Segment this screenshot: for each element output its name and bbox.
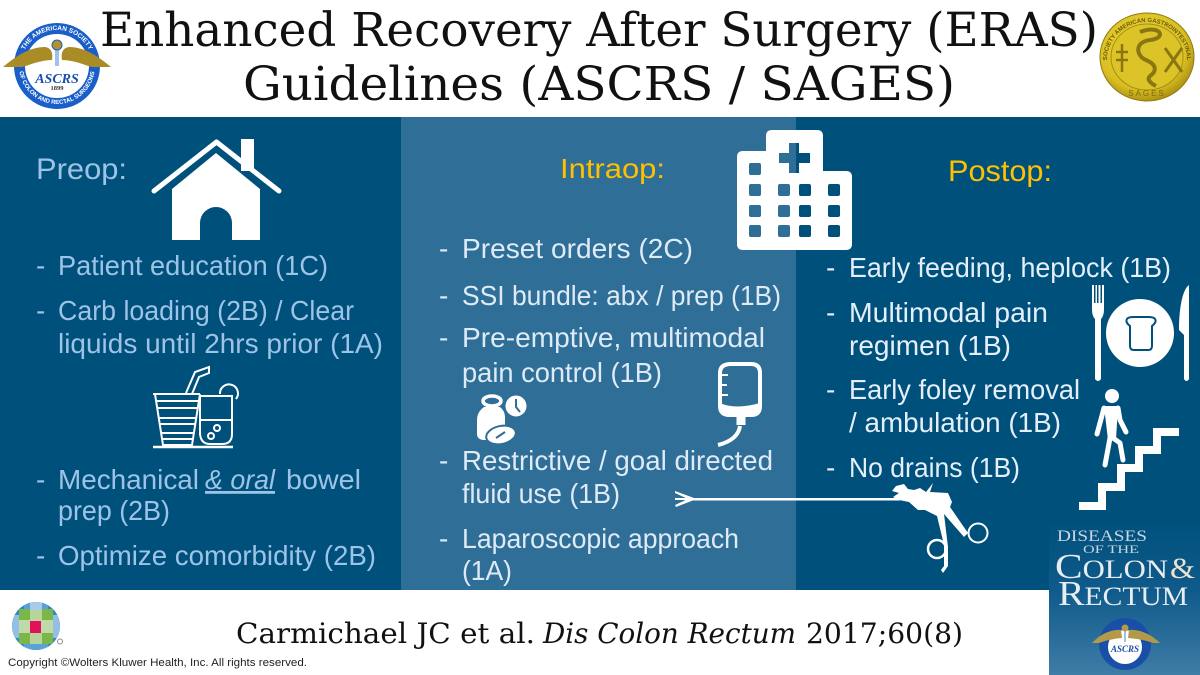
panel: postop — [796, 117, 1200, 590]
journal cover: RECTUM — [1058, 574, 1188, 613]
citation: 2017;60(8) — [806, 617, 963, 650]
text block: intraop list: - — [439, 233, 448, 264]
copyright: Copyright ©Wolters Kluwer Health, Inc. All rights reserved. — [8, 657, 307, 669]
panel: preop — [0, 117, 401, 590]
logo: ASCRS — [3, 23, 111, 109]
text block: intraop list: fluid use (1B) — [462, 478, 620, 509]
text block: intraop list: - — [439, 445, 448, 476]
text block: intraop list: - — [439, 523, 448, 554]
heading: intraop: Intraop: — [560, 153, 665, 184]
text block: preop list 2: prep (2B) — [58, 495, 170, 526]
citation: Dis Colon Rectum — [542, 617, 796, 650]
text block: intraop list: Preset orders (2C) — [462, 233, 693, 264]
logo: SAGES — [1100, 12, 1194, 102]
icon: house — [154, 139, 279, 240]
text block: postop list: - — [826, 452, 835, 483]
title: Guidelines (ASCRS / SAGES) — [243, 57, 955, 112]
text block: postop list — [826, 252, 1171, 483]
text block: preop list 1: liquids until 2hrs prior (1A) — [58, 328, 383, 359]
text block: preop list 2: & oral — [205, 464, 276, 495]
icon: IV bag — [718, 364, 760, 445]
text block: preop list 1: - — [36, 295, 45, 326]
logo: small ASCRS: ASCRS — [1110, 644, 1139, 654]
text block: intraop list: - — [439, 322, 448, 353]
text block: preop list 2: Optimize comorbidity (2B) — [58, 540, 376, 571]
text block: postop list: - — [826, 297, 835, 328]
logo: ASCRS: THE AMERICAN SOCIETY — [20, 26, 94, 49]
text block: postop list: No drains (1B) — [849, 452, 1020, 483]
icon: person walking up stairs — [1079, 389, 1179, 506]
text block: intraop list: pain control (1B) — [462, 357, 662, 388]
heading: postop: Postop: — [948, 155, 1052, 188]
icon: pills and clock — [477, 395, 527, 447]
text block: postop list: - — [826, 252, 835, 283]
icon: drinks — [153, 367, 238, 447]
logo: SAGES: SAGES — [1128, 89, 1166, 98]
text block: intraop list: SSI bundle: abx / prep (1B) — [462, 280, 781, 311]
text block: preop list 2: - — [36, 464, 45, 495]
text block: postop list: Multimodal pain — [849, 297, 1048, 328]
panel: intraop — [401, 117, 796, 590]
logo: ASCRS: 1899 — [50, 85, 64, 92]
text block: preop list 2: bowel — [286, 464, 361, 495]
text block: postop list: - — [826, 374, 835, 405]
journal cover — [1049, 520, 1200, 675]
logo: SAGES: SOCIETY AMERICAN GASTROINTESTINAL — [1102, 18, 1191, 60]
text block: intraop list: (1A) — [462, 555, 512, 586]
title — [100, 3, 1098, 112]
logo: ASCRS: ASCRS — [34, 72, 79, 87]
text block: preop list 1: Patient education (1C) — [58, 250, 328, 281]
logo: Wolters Kluwer — [12, 602, 62, 650]
text block: postop list: regimen (1B) — [849, 330, 1011, 361]
text block: preop list 1: - — [36, 250, 45, 281]
icon: hospital — [737, 130, 852, 250]
text block: postop list: Early foley removal — [849, 374, 1080, 405]
journal cover: COLON — [1055, 547, 1168, 586]
logo: small ASCRS — [1092, 618, 1160, 670]
journal cover: OF THE — [1083, 542, 1139, 556]
logo: ASCRS: OF COLON AND RECTAL SURGEONS — [20, 71, 94, 104]
text block: preop list 1 — [36, 250, 383, 359]
text block: intraop list: - — [439, 280, 448, 311]
text block: intraop list: Pre-emptive, multimodal — [462, 322, 765, 353]
text block: postop list: Early feeding, heplock (1B) — [849, 252, 1171, 283]
citation — [236, 617, 963, 650]
text block: intraop list: Laparoscopic approach — [462, 523, 739, 554]
text block: preop list 2: Mechanical — [58, 464, 199, 495]
citation: Carmichael JC et al. — [236, 617, 535, 650]
text block: intraop list — [439, 233, 781, 586]
text block: preop list 2 — [36, 464, 376, 571]
journal cover: & — [1170, 552, 1195, 585]
icon: laparoscopic instrument — [675, 483, 988, 573]
heading: preop: Preop: — [36, 153, 127, 186]
journal cover: DISEASES — [1057, 528, 1147, 545]
text block: postop list: / ambulation (1B) — [849, 407, 1061, 438]
icon: fork, plate and knife — [1092, 285, 1189, 381]
text block: preop list 1: Carb loading (2B) / Clear — [58, 295, 354, 326]
text block: preop list 2: - — [36, 540, 45, 571]
text block: intraop list: Restrictive / goal directed — [462, 445, 773, 476]
title: Enhanced Recovery After Surgery (ERAS) — [100, 3, 1098, 58]
